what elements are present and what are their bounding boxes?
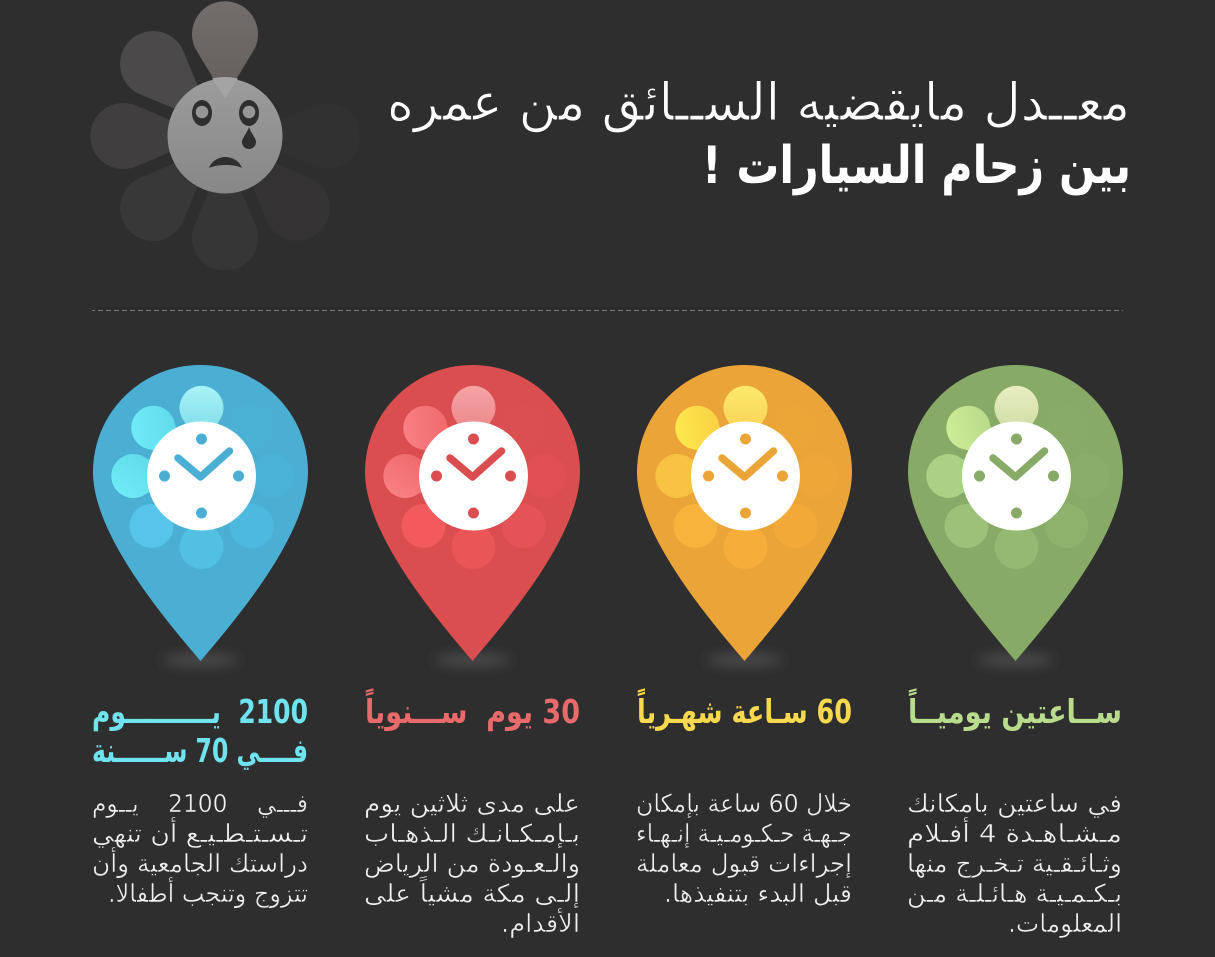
pin: red: [365, 365, 580, 666]
text: red column: والـعـودة من الرياض: [364, 849, 580, 879]
text: blue column: [92, 789, 308, 909]
text: red column: على مدى ثلاثين يوم: [364, 789, 580, 818]
text: red column: [364, 789, 580, 938]
text: orange column: جـهـة حـكـومـيـة إنـهـاء: [636, 819, 852, 849]
text: blue column: دراستك الجامعية وأن: [92, 846, 308, 879]
text: blue column: فـــي 2100 يــوم: [92, 789, 308, 818]
text: green column: مـشـاهـدة 4 أفـلام: [907, 816, 1122, 848]
pin: orange: [637, 365, 852, 666]
pin: blue: [93, 365, 308, 666]
heading: blue column: فــــي 70 ســــــنة: [92, 731, 308, 770]
text: orange column: خلال 60 ساعة بإمكان: [636, 789, 852, 819]
text: green column: بـكـمـيـة هـائـلـة مـن: [907, 879, 1122, 908]
text: blue column: تـسـتـطـيـع أن تنهي: [92, 816, 308, 849]
text: orange column: إجراءات قبول معاملة: [636, 849, 852, 879]
text: green column: المعلومات.: [1008, 909, 1122, 938]
icon: crying face flower: [90, 1, 360, 271]
text: green column: [907, 789, 1122, 938]
heading: red column: 30 يوم ســـنوياً: [365, 688, 580, 732]
heading: blue column: 2100 يــــــــــوم: [92, 692, 308, 732]
text: green column: في ساعتين بامكانك: [907, 789, 1122, 818]
pin: green: [908, 365, 1123, 666]
title: معــدل مايقضيه الســائق من عمره: [387, 73, 1130, 133]
text: green column: وثـائـقـية تـخـرج منها: [907, 849, 1122, 879]
title: [387, 73, 1131, 196]
text: blue column: تتزوج وتنجب أطفالا.: [108, 876, 308, 909]
text: orange column: [636, 789, 852, 908]
title: بين زحام السيارات !: [702, 136, 1131, 196]
heading: orange column: 60 سـاعة شهـرياً: [637, 688, 852, 732]
text: red column: بـإمـكـانـك الـذهـاب: [364, 819, 580, 849]
text: red column: إلـى مكة مشياً على: [364, 876, 580, 909]
heading: green column: ســاعتين يوميــاً: [908, 688, 1122, 732]
heading: blue column: [92, 692, 308, 770]
text: orange column: قبل البدء بتنفيذها.: [664, 879, 852, 908]
text: red column: الأقدام.: [501, 907, 580, 938]
